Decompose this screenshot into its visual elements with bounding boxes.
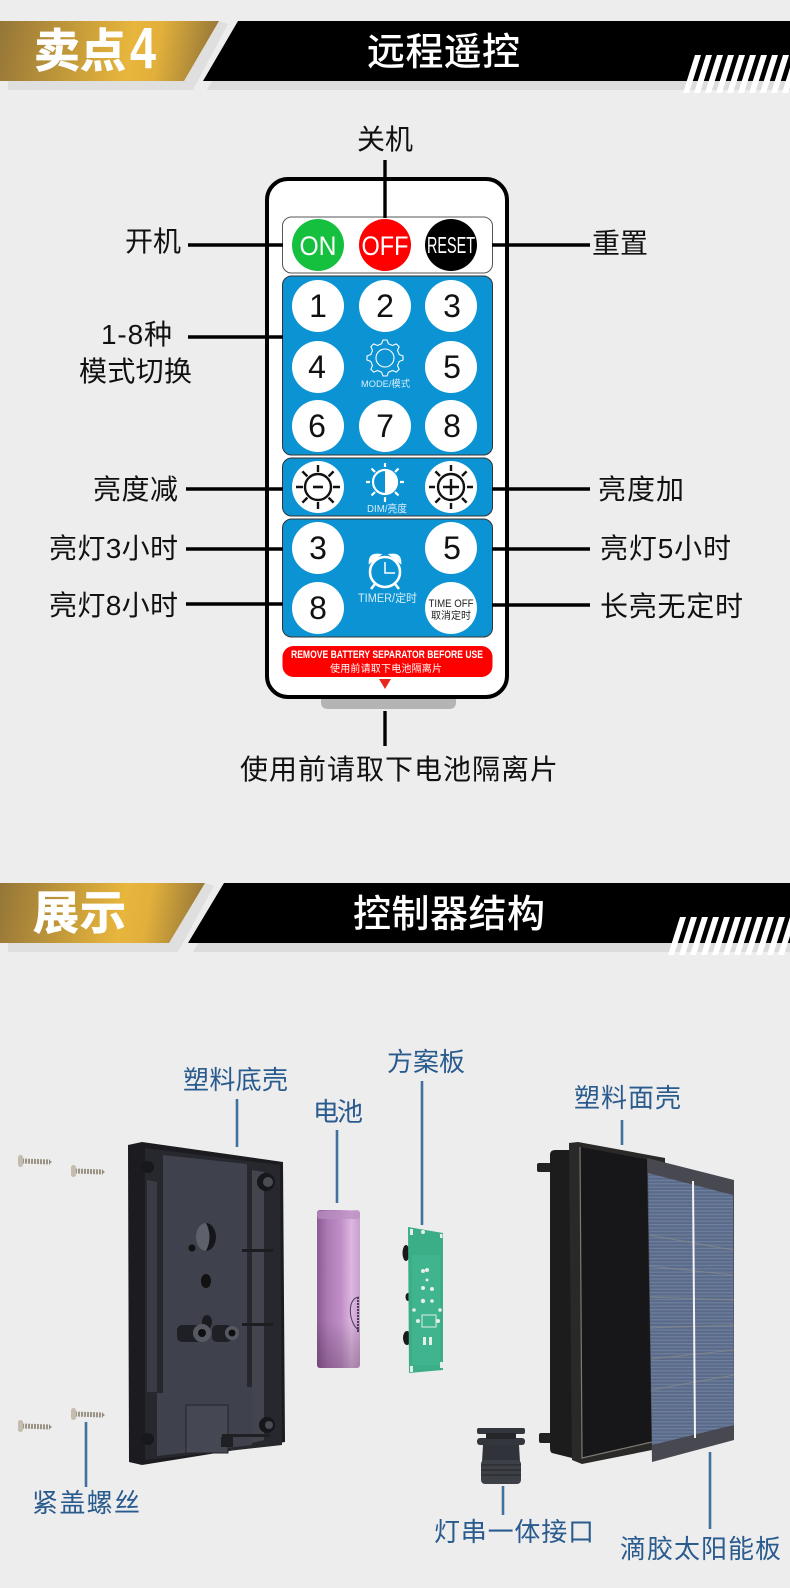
timer numbers: 3 [309, 530, 327, 566]
screw [18, 1420, 52, 1432]
part labels: 塑料底壳 [183, 1065, 288, 1095]
remote labels: 使用前请取下电池隔离片 [240, 754, 558, 785]
mode numbers: 2 [376, 288, 394, 324]
remote labels [49, 124, 743, 785]
callout leader lines [186, 160, 590, 746]
mode numbers: 1 [309, 288, 327, 324]
timer numbers [309, 530, 461, 626]
part labels [32, 1047, 781, 1564]
tab label: 4 [130, 16, 156, 81]
part labels: 紧盖螺丝 [32, 1488, 140, 1518]
mode numbers: 6 [308, 408, 326, 444]
bar title: 远程遥控 [367, 32, 520, 74]
RESET button [425, 219, 477, 271]
ON button: ON [300, 231, 336, 261]
mode numbers: 8 [443, 408, 461, 444]
remote labels: 亮灯8小时 [49, 590, 178, 621]
battery warning strip: 使用前请取下电池隔离片 [330, 662, 442, 675]
stripes [683, 55, 790, 93]
battery warning strip: REMOVE BATTERY SEPARATOR BEFORE USE [291, 649, 483, 661]
battery [317, 1210, 360, 1368]
light string connector [477, 1428, 525, 1484]
part leader lines [86, 1081, 710, 1529]
remote labels: 关机 [357, 124, 413, 155]
battery warning strip [282, 646, 492, 689]
circuit board [402, 1227, 443, 1373]
part labels: 滴胶太阳能板 [620, 1534, 781, 1564]
black title bar [188, 883, 790, 943]
part labels: 灯串一体接口 [434, 1517, 594, 1547]
part labels: 电池 [313, 1097, 363, 1127]
plastic back shell [128, 1142, 285, 1465]
mode numbers [308, 288, 461, 444]
remote labels: 亮灯5小时 [600, 533, 731, 564]
ON button [292, 219, 344, 271]
solar panel [647, 1158, 734, 1462]
mode numbers: 3 [443, 288, 461, 324]
timer panel [282, 519, 492, 637]
plastic front shell [537, 1142, 665, 1464]
icon: brightness plus [425, 461, 477, 513]
remote labels: 开机 [125, 226, 181, 257]
OFF button: OFF [362, 231, 408, 261]
RESET button: RESET [427, 232, 475, 258]
remote labels: 亮度减 [93, 474, 178, 505]
timer numbers: 8 [309, 590, 327, 626]
icon: brightness half sun [366, 463, 404, 502]
mode numbers: 4 [308, 349, 326, 385]
OFF button [359, 219, 411, 271]
section header: controller structure [0, 883, 790, 955]
screws [18, 1155, 105, 1432]
part labels: 方案板 [387, 1047, 465, 1077]
remote labels: 1-8种 [101, 319, 172, 350]
timer caption: TIMER/定时 [358, 591, 417, 605]
part labels: 塑料面壳 [574, 1083, 681, 1113]
stripes [668, 917, 790, 955]
mode numbers: 5 [443, 349, 461, 385]
mode numbers: 7 [376, 408, 394, 444]
remote labels: 长亮无定时 [600, 591, 743, 622]
warning arrow [379, 679, 391, 689]
brightness caption: DIM/亮度 [367, 502, 407, 515]
remote body [267, 179, 507, 697]
screw [18, 1155, 52, 1167]
remote labels: 模式切换 [79, 356, 192, 387]
gold tab [0, 883, 205, 943]
gold tab [0, 21, 219, 81]
power button panel [282, 217, 492, 273]
remote labels: 亮度加 [598, 474, 684, 505]
icon: mode gear [367, 340, 403, 376]
icon: brightness minus [292, 461, 344, 513]
time off button text [428, 598, 474, 622]
black title bar [203, 21, 790, 81]
time off button text: 取消定时 [431, 609, 471, 622]
icon: alarm clock [370, 555, 400, 589]
remote labels: 亮灯3小时 [49, 533, 178, 564]
brightness panel [282, 458, 492, 516]
screw [71, 1408, 105, 1420]
time off button text: TIME OFF [428, 598, 474, 610]
battery separator tab [321, 696, 456, 709]
screw [71, 1165, 105, 1177]
tab label [34, 16, 156, 81]
section header: remote control [0, 16, 790, 93]
mode caption: MODE/模式 [361, 378, 410, 390]
tab label: 卖点 [34, 25, 126, 77]
bar title: 控制器结构 [353, 894, 545, 936]
remote labels: 重置 [592, 228, 648, 259]
timer numbers: 5 [443, 530, 461, 566]
mode button panel [282, 276, 492, 455]
remote control [267, 179, 507, 709]
tab label: 展示 [33, 887, 126, 939]
